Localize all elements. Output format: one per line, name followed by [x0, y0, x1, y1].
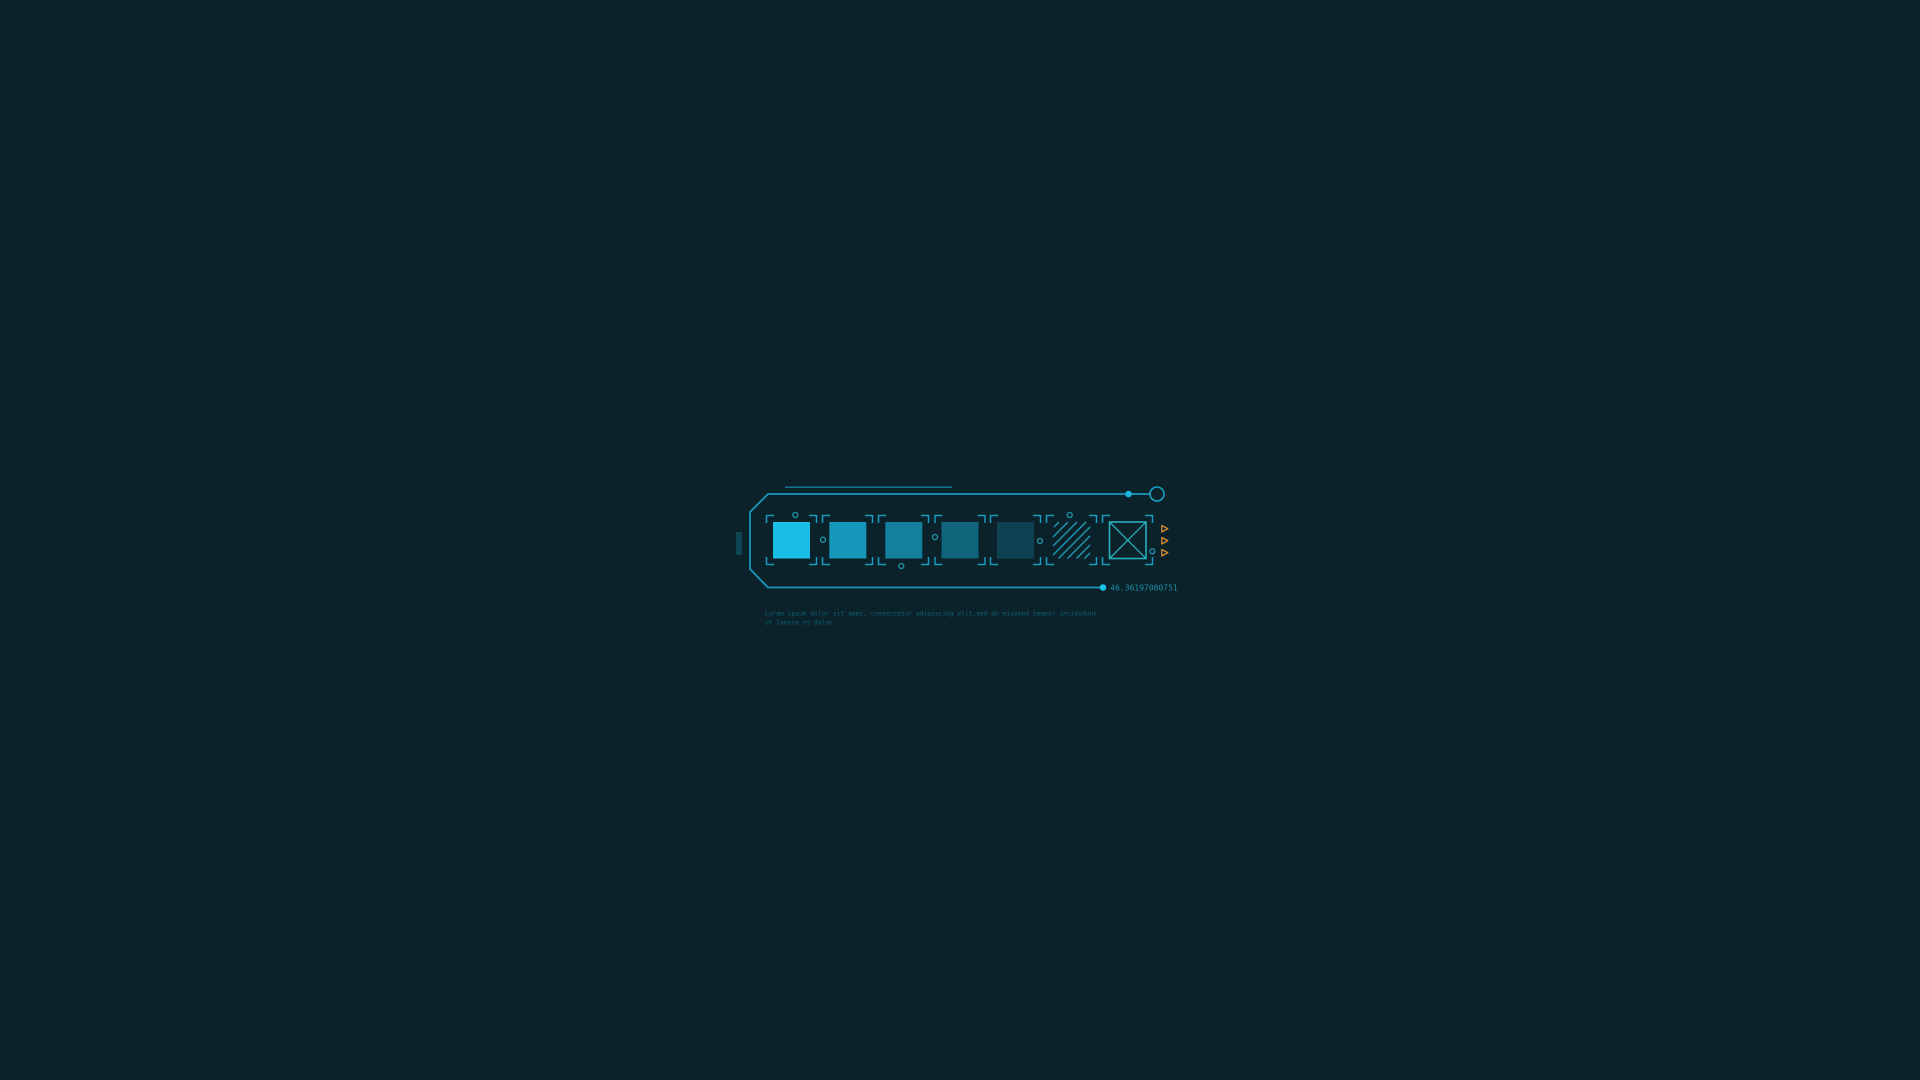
- caption text: ut labore et dolor: [765, 620, 833, 626]
- outer chamfered frame: [750, 487, 1164, 591]
- small ring markers: [793, 512, 1155, 568]
- square 4: [935, 516, 985, 564]
- hatched square: [1046, 516, 1096, 564]
- top end ring: [1150, 487, 1164, 501]
- caption text: [765, 610, 1097, 626]
- square 3: [878, 516, 928, 564]
- orange triangle arrows: [1162, 526, 1168, 556]
- left side tab: [736, 532, 742, 555]
- top accent line: [785, 486, 952, 488]
- square 5 darkest: [990, 516, 1040, 564]
- HUD widget: [736, 487, 1178, 626]
- crossed square: [1102, 516, 1152, 564]
- coordinate value: 46.36197080751: [1110, 584, 1178, 592]
- square 1 brightest: [766, 516, 816, 564]
- caption text: Lorem ipsum dolor sit amet, consectetur adipiscing elit,sed do eiusmod tempor incididunt: [765, 610, 1097, 618]
- top node dot: [1125, 491, 1132, 497]
- bottom node dot: [1100, 584, 1106, 591]
- square 2: [822, 516, 872, 564]
